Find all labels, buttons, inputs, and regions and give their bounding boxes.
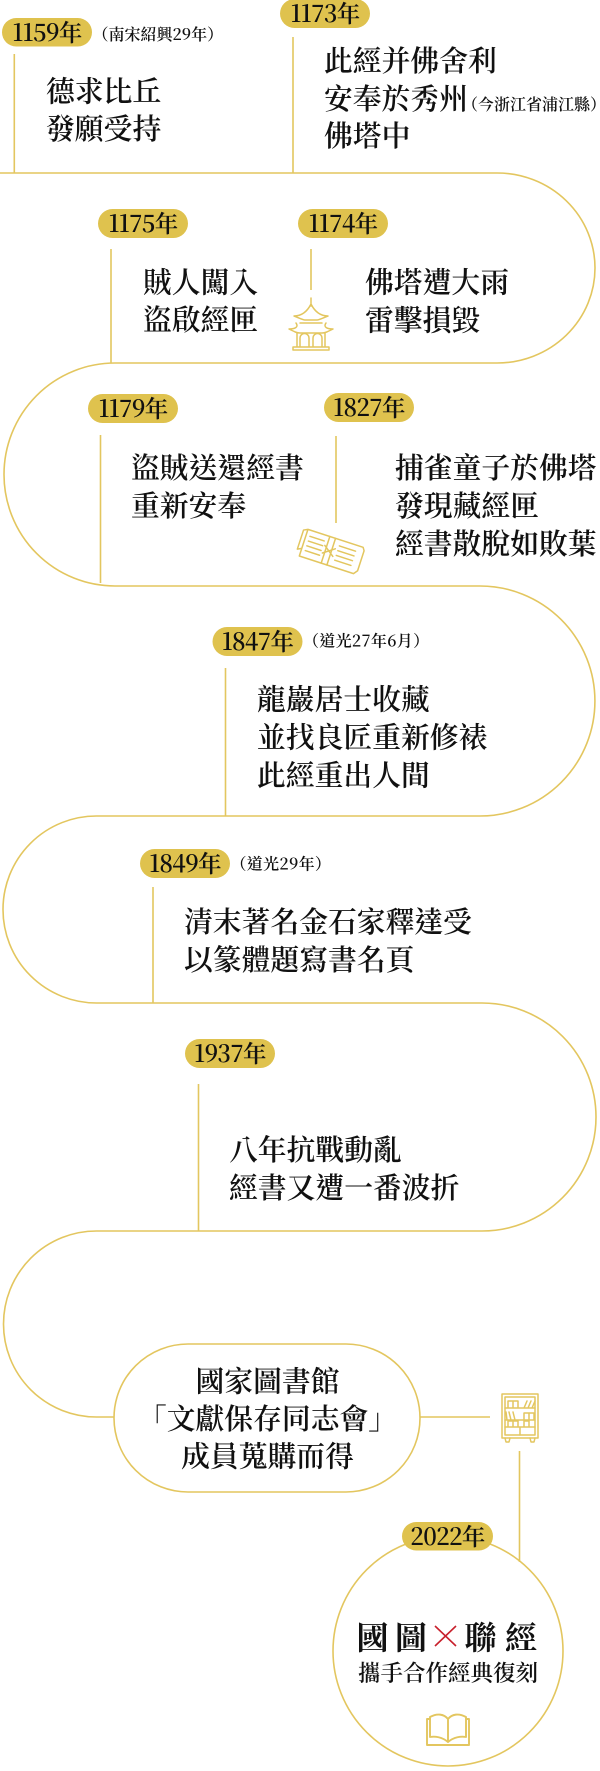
panel: 2022 circle <box>333 1518 563 1766</box>
text: 1173 event: 佛塔中 <box>324 114 410 155</box>
text: 1175 event: 盜啟經匣 <box>143 298 258 339</box>
connector line <box>13 54 15 173</box>
panel: 1174 <box>289 205 509 350</box>
text: 1827 event: 捕雀童子於佛塔 <box>395 446 597 487</box>
title: NCL x Linking: 經 <box>505 1613 537 1659</box>
connector line <box>292 37 294 173</box>
text: 1847 event: 並找良匠重新修裱 <box>257 716 488 756</box>
text: national library: 國家圖書館 <box>196 1360 340 1400</box>
text: 1937 event: 八年抗戰動亂 <box>229 1128 402 1169</box>
text: 1179 event: 重新安奉 <box>131 484 246 525</box>
panel: 1847 <box>212 623 488 816</box>
panel: 1179 <box>88 390 304 583</box>
year badge 1827: 1827年 <box>333 389 405 423</box>
note: era: （道光29年） <box>230 852 331 874</box>
title: NCL x Linking: 聯 <box>464 1613 498 1659</box>
panel: 1937 <box>185 1035 460 1231</box>
text: national library: 成員蒐購而得 <box>181 1434 354 1476</box>
connector line <box>310 249 312 290</box>
text: 1849 event: 清末著名金石家釋達受 <box>184 900 472 941</box>
text: 1159 event <box>46 70 161 148</box>
panel: 1159 <box>2 14 223 173</box>
text: 1827 event: 經書散脫如敗葉 <box>395 522 597 563</box>
title: NCL x Linking: 國 <box>356 1613 389 1659</box>
text: 1827 event <box>395 446 597 563</box>
note: era: （道光27年6月） <box>303 628 429 652</box>
year badge 1849: 1849年 <box>149 845 221 879</box>
text: 1179 event <box>131 446 304 525</box>
text: 1849 event <box>184 900 472 979</box>
connector line <box>198 1084 200 1231</box>
panel: 1849 <box>140 845 472 1003</box>
text: 1849 event: 以篆體題寫書名頁 <box>184 938 418 979</box>
text: national library <box>138 1360 397 1476</box>
text: 1175 event: 賊人闖入 <box>143 260 258 302</box>
text: 1827 event: 發現藏經匣 <box>395 484 539 525</box>
text: 1173 event <box>324 39 600 155</box>
connector line <box>100 435 102 583</box>
year badge 1175: 1175年 <box>108 205 178 239</box>
panel: 1173 <box>280 0 600 173</box>
text: national library: 「文獻保存同志會」 <box>138 1397 397 1438</box>
title: NCL x Linking: 圖 <box>395 1613 427 1659</box>
text: 1174 event <box>365 260 509 340</box>
icon: open book <box>427 1715 469 1745</box>
year badge 1937: 1937年 <box>194 1035 266 1069</box>
icon: bookcase <box>502 1394 538 1442</box>
text: 1173 event: 安奉於秀州 <box>324 77 468 118</box>
circle outline <box>333 1536 563 1766</box>
connector line <box>224 668 226 816</box>
connector line <box>335 436 337 523</box>
text: 1159 event: 發願受持 <box>46 107 161 148</box>
text: 1847 event: 龍巖居士收藏 <box>257 678 430 718</box>
year badge 1159: 1159年 <box>12 14 82 48</box>
text: 1173 event: 此經并佛舍利 <box>324 39 497 80</box>
year badge 1847: 1847年 <box>222 623 293 657</box>
connector line <box>152 887 154 1003</box>
text: 1937 event: 經書又遭一番波折 <box>229 1166 460 1207</box>
text: 1937 event <box>229 1128 460 1207</box>
text: 1159 event: 德求比丘 <box>46 70 161 110</box>
text: 1847 event <box>257 678 488 794</box>
pill outline <box>114 1344 420 1492</box>
text: 1174 event: 雷擊損毀 <box>365 298 480 340</box>
note: era: （南宋紹興29年） <box>92 22 223 45</box>
icon: pagoda <box>289 298 333 350</box>
connector to bookcase <box>420 1416 490 1418</box>
icon: bound scrolls <box>296 528 365 575</box>
text: 1175 event <box>143 260 258 339</box>
panel: 1175 <box>98 205 258 363</box>
year badge 1179: 1179年 <box>98 390 168 424</box>
title: NCL x Linking <box>356 1613 537 1659</box>
text: 1179 event: 盜賊送還經書 <box>131 446 304 487</box>
winding timeline path <box>0 173 596 1417</box>
panel: national library pill <box>114 1344 420 1492</box>
text: 1174 event: 佛塔遭大雨 <box>365 260 509 302</box>
year badge 2022: 2022年 <box>410 1518 485 1552</box>
connector line <box>110 249 112 363</box>
icon: red cross <box>435 1626 456 1646</box>
connector to circle <box>518 1451 520 1562</box>
panel: 1827 <box>296 389 597 575</box>
year badge 1174: 1174年 <box>309 205 378 239</box>
subtitle: 攜手合作經典復刻 <box>358 1656 538 1688</box>
text: 1847 event: 此經重出人間 <box>257 754 430 794</box>
